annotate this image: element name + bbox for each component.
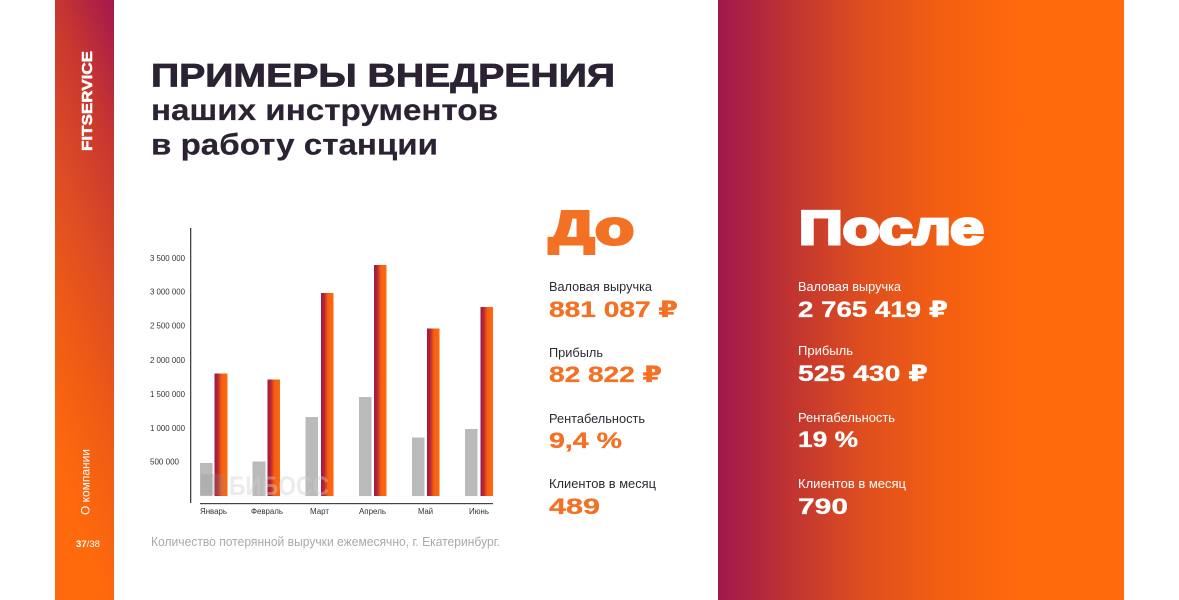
y axis labels: 3 000 000: [150, 288, 186, 296]
metric: margin before: Рентабельность: [549, 411, 645, 426]
metric: profit before: [549, 345, 662, 387]
month labels: Февраль: [251, 507, 283, 516]
metric: margin after: 19 %: [798, 427, 858, 452]
y axis labels: 1 500 000: [150, 390, 186, 399]
page number: 37/38: [76, 539, 100, 549]
metric: profit after: Прибыль: [798, 343, 853, 358]
y axis labels: 1 000 000: [150, 424, 186, 433]
metric: profit after: [798, 343, 928, 386]
metric: clients before: [549, 476, 657, 519]
title: наших инструментов: [151, 94, 498, 127]
watermark: БИБОСС: [229, 471, 329, 501]
metric: clients after: [798, 476, 907, 519]
metric: margin after: [798, 410, 895, 452]
metric: clients after: Клиентов в месяц: [798, 476, 907, 491]
metric: revenue after: [798, 279, 948, 322]
section label: О компании: [78, 449, 92, 515]
metric: revenue before: 881 087 ₽: [549, 297, 678, 322]
bar chart: [150, 228, 493, 516]
metric: revenue before: [549, 279, 678, 322]
metric: revenue after: 2 765 419 ₽: [798, 297, 948, 322]
metric: clients before: 489: [549, 494, 600, 519]
month labels: Июнь: [469, 507, 489, 516]
title: в работу станции: [151, 128, 438, 162]
metric: margin before: [549, 411, 645, 453]
metric: margin before: 9,4 %: [549, 428, 622, 453]
panel: side band: [55, 0, 114, 600]
month labels: [200, 507, 489, 516]
metric: revenue before: Валовая выручка: [549, 279, 653, 294]
metric: revenue after: Валовая выручка: [798, 279, 902, 294]
brand name: FITSERVICE: [79, 51, 96, 151]
heading: after: После: [799, 201, 984, 254]
metric: clients before: Клиентов в месяц: [549, 476, 657, 491]
title: ПРИМЕРЫ ВНЕДРЕНИЯ: [151, 58, 615, 94]
month labels: Апрель: [359, 507, 386, 516]
metric: profit before: Прибыль: [549, 345, 603, 360]
metric: profit before: 82 822 ₽: [549, 362, 662, 387]
metric: clients after: 790: [798, 494, 848, 519]
y axis labels: 3 500 000: [150, 254, 186, 263]
grey bars: [200, 397, 478, 496]
heading: before: До: [549, 201, 634, 254]
chart caption: Количество потерянной выручки ежемесячно, г. Екатеринбург.: [151, 535, 500, 549]
month labels: Март: [310, 507, 329, 516]
title: [151, 58, 615, 162]
month labels: Май: [418, 507, 433, 516]
axes: [190, 228, 493, 504]
panel: after: [718, 0, 1124, 600]
y axis labels: 2 500 000: [150, 322, 186, 330]
watermark: [201, 471, 329, 501]
panel: before: [549, 201, 678, 519]
metric: margin after: Рентабельность: [798, 410, 895, 425]
y axis labels: [150, 254, 186, 466]
month labels: Январь: [200, 507, 227, 516]
y axis labels: 2 000 000: [150, 356, 186, 365]
orange bars: [214, 265, 493, 496]
metric: profit after: 525 430 ₽: [798, 361, 928, 386]
y axis labels: 500 000: [150, 458, 180, 466]
